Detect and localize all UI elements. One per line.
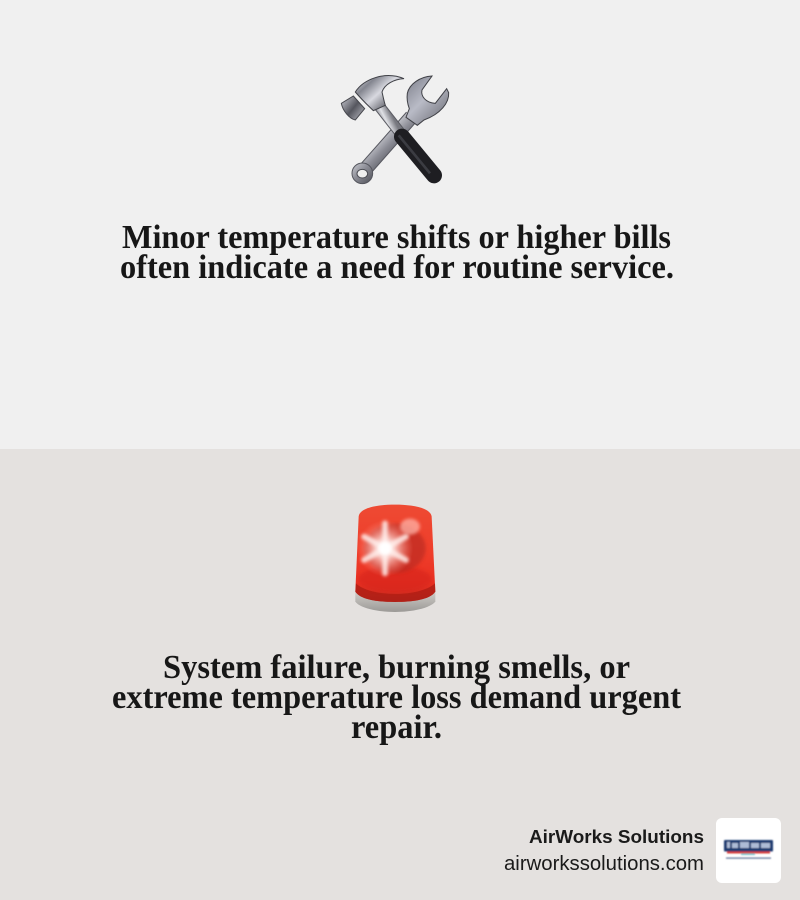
heading: urgent repair message: System failure, burning smells, or	[163, 649, 630, 686]
panel: routine service	[0, 0, 800, 449]
heading: routine service message	[120, 219, 674, 286]
footer: company name and website: airworkssolutions.com	[504, 853, 704, 875]
footer: company name and website: AirWorks Solutions	[529, 826, 704, 847]
heading: routine service message: Minor temperature shifts or higher bills	[122, 219, 671, 256]
heading: routine service message: often indicate a need for routine service.	[120, 249, 674, 286]
footer: company name and website	[504, 826, 704, 875]
logo: AirWorks badge	[716, 818, 781, 883]
icon: red emergency siren	[355, 505, 435, 612]
heading: urgent repair message	[112, 649, 682, 746]
panel: urgent repair	[0, 449, 800, 900]
icon: hammer and wrench	[341, 76, 449, 184]
heading: urgent repair message: extreme temperature loss demand urgent	[112, 679, 682, 716]
heading: urgent repair message: repair.	[351, 709, 442, 746]
